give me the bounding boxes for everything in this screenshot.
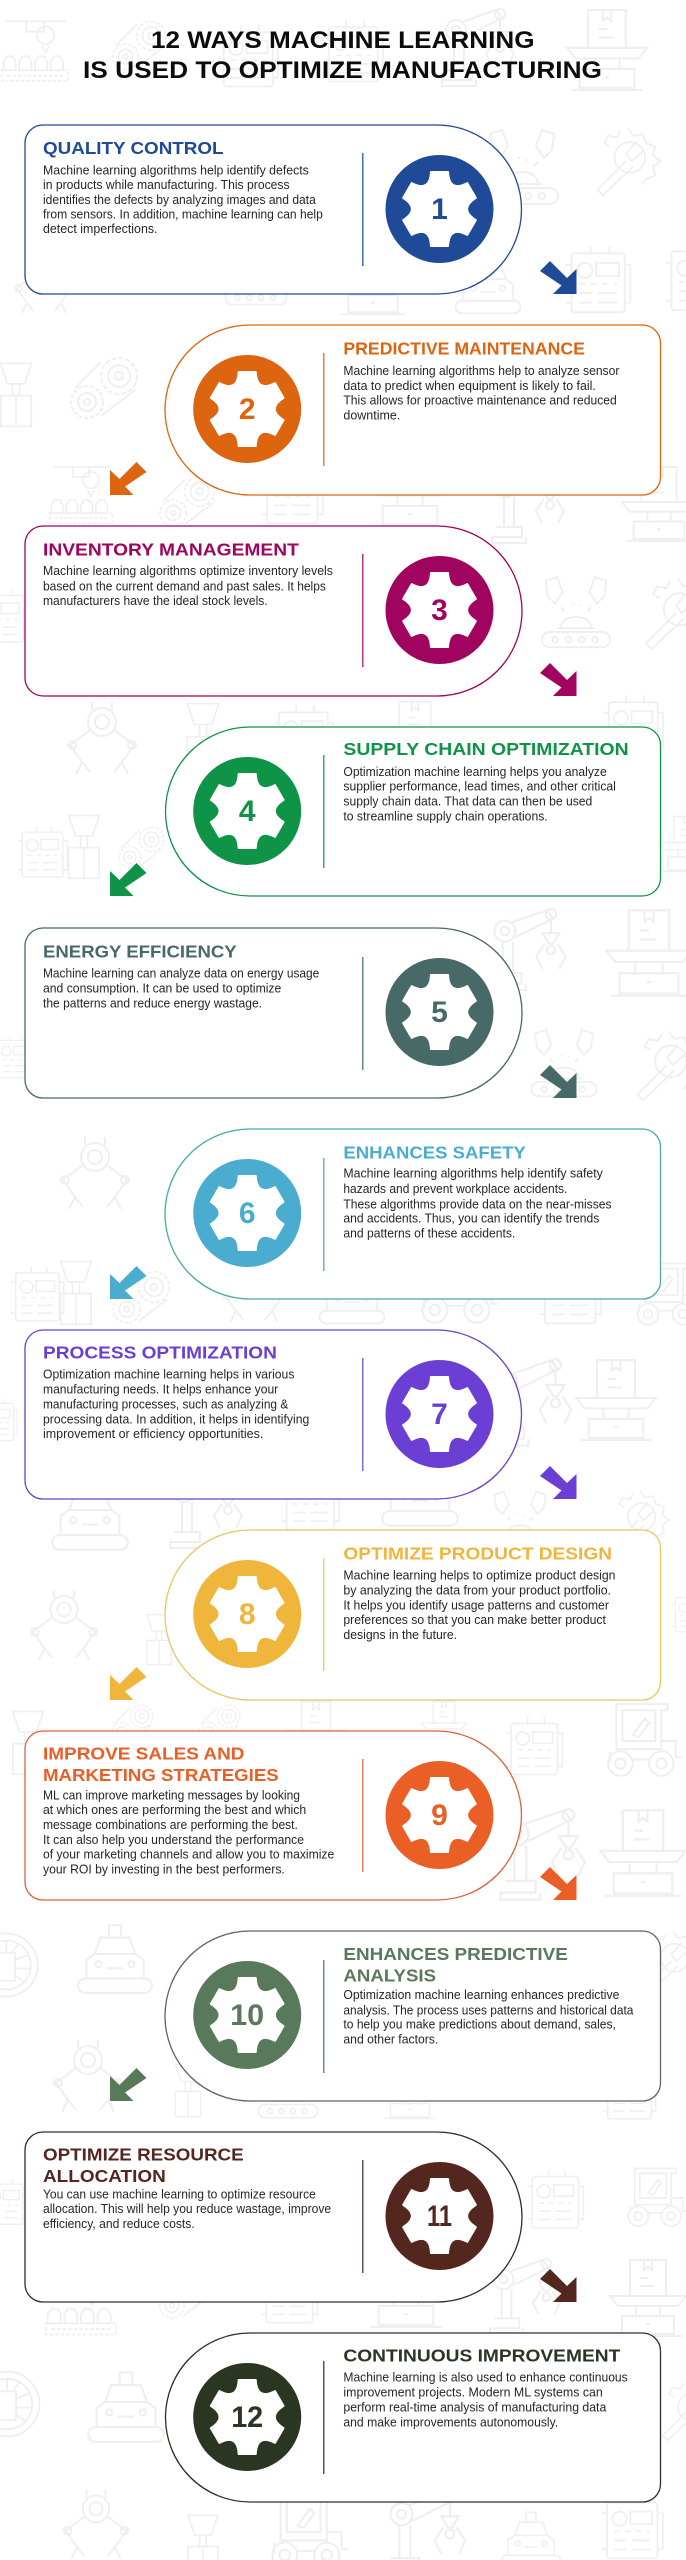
- text: sales and marketing description: It can also help you understand the performance: [43, 1833, 304, 1847]
- text: quality control description: Machine learning algorithms help identify defects: [43, 163, 309, 177]
- text: quality control description: [43, 163, 323, 236]
- text: enhances safety description: and accidents. Thus, you can identify the trends: [343, 1212, 599, 1226]
- heading: inventory management: INVENTORY MANAGEMENT: [43, 539, 299, 559]
- panel: 10 enhances predictive analysis: [165, 1931, 660, 2101]
- arrow: 11 to 12: [540, 2269, 576, 2302]
- heading: predictive maintenance: PREDICTIVE MAINTENANCE: [343, 338, 585, 358]
- text: continuous improvement description: improvement projects. Modern ML systems can: [343, 2386, 603, 2400]
- heading: energy efficiency: ENERGY EFFICIENCY: [43, 942, 237, 962]
- heading: enhances predictive analysis: [343, 1944, 568, 1986]
- text: predictive analysis description: to help you make predictions about demand, sales,: [343, 2018, 616, 2032]
- title: IS USED TO OPTIMIZE MANUFACTURING: [83, 57, 602, 84]
- text: predictive maintenance description: Machine learning algorithms help to analyze sensor: [343, 364, 619, 378]
- arrow: 10 to 11: [110, 2068, 146, 2101]
- arrow: 6 to 7: [110, 1266, 146, 1299]
- arrow: 5 to 6: [540, 1065, 576, 1098]
- icon: gear badge 5: [386, 958, 494, 1066]
- panel: 11 optimize resource allocation: [25, 2132, 522, 2302]
- icon: gear badge 8: 8: [239, 1598, 256, 1631]
- heading: continuous improvement: CONTINUOUS IMPROVEMENT: [343, 2346, 621, 2366]
- text: product design description: preferences so that you can make better product: [343, 1613, 606, 1627]
- text: quality control description: in products while manufacturing. This process: [43, 178, 290, 192]
- heading: improve sales and marketing strategies: MARKETING STRATEGIES: [43, 1765, 279, 1785]
- icon: gear badge 3: 3: [431, 594, 448, 627]
- text: continuous improvement description: Machine learning is also used to enhance continuous: [343, 2371, 628, 2385]
- icon: gear badge 3: [386, 556, 494, 664]
- text: predictive maintenance description: data to predict when equipment is likely to fail.: [343, 379, 596, 393]
- icon: gear badge 2: 2: [239, 393, 256, 426]
- icon: gear badge 11: [386, 2162, 494, 2270]
- arrow: 7 to 8: [540, 1466, 576, 1499]
- heading: optimize resource allocation: [43, 2145, 244, 2186]
- text: enhances safety description: [343, 1167, 612, 1241]
- text: inventory management description: based on the current demand and past sales. It helps: [43, 579, 326, 593]
- text: product design description: designs in the future.: [343, 1628, 457, 1642]
- icon: gear badge 1: [386, 155, 494, 263]
- text: resource allocation description: You can use machine learning to optimize resource: [43, 2187, 316, 2201]
- heading: quality control: QUALITY CONTROL: [43, 138, 224, 158]
- panel: 12 continuous improvement: [166, 2333, 661, 2502]
- text: enhances safety description: Machine learning algorithms help identify safety: [343, 1167, 603, 1181]
- icon: gear badge 5: 5: [431, 996, 448, 1029]
- icon: gear badge 10: 10: [230, 1999, 264, 2032]
- text: process optimization description: processing data. In addition, it helps in identifying: [43, 1412, 309, 1426]
- panel: 5 energy efficiency: [25, 928, 522, 1098]
- icon: gear badge 2: [193, 355, 301, 463]
- text: energy efficiency description: [43, 967, 319, 1010]
- panel: 6 enhances safety: [165, 1129, 660, 1299]
- panel: 3 inventory management: [25, 526, 522, 696]
- arrow: 1 to 2: [540, 261, 576, 294]
- panel: 2 predictive maintenance: [165, 325, 660, 495]
- text: product design description: [343, 1568, 616, 1642]
- text: energy efficiency description: Machine learning can analyze data on energy usage: [43, 967, 319, 981]
- text: enhances safety description: and patterns of these accidents.: [343, 1227, 515, 1241]
- icon: gear badge 10: [193, 1961, 301, 2069]
- icon: gear badge 7: [386, 1360, 494, 1468]
- heading: supply chain optimization: SUPPLY CHAIN OPTIMIZATION: [343, 739, 629, 759]
- text: product design description: It helps you identify usage patterns and customer: [343, 1598, 609, 1612]
- text: predictive analysis description: analysis. The process uses patterns and historical data: [343, 2003, 633, 2017]
- text: inventory management description: Machine learning algorithms optimize inventory levels: [43, 564, 333, 578]
- heading: optimize resource allocation: ALLOCATION: [43, 2166, 166, 2186]
- icon: gear badge 8: [193, 1560, 301, 1668]
- icon: gear badge 7: 7: [431, 1398, 448, 1431]
- text: energy efficiency description: the patterns and reduce energy wastage.: [43, 996, 262, 1010]
- text: continuous improvement description: [343, 2371, 628, 2429]
- text: process optimization description: improvement or efficiency opportunities.: [43, 1427, 263, 1441]
- text: process optimization description: [43, 1368, 309, 1441]
- text: sales and marketing description: ML can improve marketing messages by looking: [43, 1788, 300, 1802]
- text: product design description: Machine learning helps to optimize product design: [343, 1568, 616, 1582]
- icon: gear badge 9: [386, 1761, 494, 1869]
- heading: optimize resource allocation: OPTIMIZE RESOURCE: [43, 2145, 244, 2165]
- text: predictive analysis description: and other factors.: [343, 2033, 438, 2047]
- text: resource allocation description: [43, 2187, 331, 2231]
- heading: optimize product design: OPTIMIZE PRODUCT DESIGN: [343, 1543, 612, 1563]
- heading: enhances safety: ENHANCES SAFETY: [343, 1142, 526, 1162]
- text: predictive analysis description: [343, 1988, 633, 2047]
- icon: gear badge 1: 1: [431, 193, 448, 226]
- text: sales and marketing description: message combinations are performing the best.: [43, 1818, 298, 1832]
- heading: improve sales and marketing strategies: [43, 1743, 279, 1785]
- text: sales and marketing description: at which ones are performing the best and which: [43, 1803, 306, 1817]
- icon: gear badge 12: 12: [231, 2401, 263, 2434]
- text: sales and marketing description: of your marketing channels and allow you to maximize: [43, 1848, 334, 1862]
- text: supply chain description: [343, 765, 616, 824]
- text: predictive analysis description: Optimization machine learning enhances predictive: [343, 1988, 619, 2002]
- text: predictive maintenance description: [343, 364, 619, 422]
- text: resource allocation description: allocation. This will help you reduce wastage, improve: [43, 2202, 331, 2216]
- text: process optimization description: manufacturing processes, such as analyzing &: [43, 1397, 289, 1411]
- text: predictive maintenance description: downtime.: [343, 408, 400, 422]
- text: inventory management description: [43, 564, 333, 608]
- arrow: 3 to 4: [540, 663, 576, 696]
- panel: 8 optimize product design: [165, 1530, 660, 1700]
- text: product design description: by analyzing the data from your product portfolio.: [343, 1583, 611, 1597]
- arrow: 4 to 5: [110, 863, 146, 896]
- text: quality control description: from sensors. In addition, machine learning can help: [43, 208, 323, 222]
- arrow: 9 to 10: [540, 1867, 576, 1900]
- icon: gear badge 9: 9: [431, 1799, 448, 1832]
- heading: enhances predictive analysis: ANALYSIS: [343, 1966, 436, 1986]
- text: supply chain description: supplier performance, lead times, and other critical: [343, 780, 616, 794]
- icon: gear badge 6: 6: [239, 1197, 256, 1230]
- text: sales and marketing description: your ROI by investing in the best performers.: [43, 1863, 285, 1877]
- text: process optimization description: Optimization machine learning helps in various: [43, 1368, 294, 1382]
- icon: gear badge 4: 4: [239, 795, 256, 828]
- text: supply chain description: Optimization machine learning helps you analyze: [343, 765, 607, 779]
- heading: enhances predictive analysis: ENHANCES PREDICTIVE: [343, 1944, 568, 1964]
- text: resource allocation description: efficiency, and reduce costs.: [43, 2217, 195, 2231]
- text: sales and marketing description: [43, 1788, 334, 1877]
- arrow: 8 to 9: [110, 1667, 146, 1700]
- text: quality control description: identifies the defects by analyzing images and data: [43, 193, 316, 207]
- title: [83, 27, 602, 84]
- text: predictive maintenance description: This allows for proactive maintenance and reduced: [343, 393, 617, 407]
- panel: 1 quality control: [25, 125, 522, 294]
- text: continuous improvement description: perform real-time analysis of manufacturing data: [343, 2400, 606, 2414]
- arrow: 2 to 3: [110, 462, 146, 495]
- text: continuous improvement description: and make improvements autonomously.: [343, 2415, 558, 2429]
- text: enhances safety description: These algorithms provide data on the near-misses: [343, 1197, 612, 1211]
- text: energy efficiency description: and consumption. It can be used to optimize: [43, 982, 281, 996]
- icon: gear badge 11: 11: [427, 2200, 452, 2233]
- panel: 4 supply chain optimization: [166, 727, 661, 896]
- icon: gear badge 12: [193, 2363, 301, 2471]
- icon: gear badge 6: [193, 1159, 301, 1267]
- title: 12 WAYS MACHINE LEARNING: [151, 27, 534, 54]
- text: supply chain description: supply chain data. That data can then be used: [343, 795, 592, 809]
- heading: improve sales and marketing strategies: IMPROVE SALES AND: [43, 1743, 244, 1763]
- text: supply chain description: to streamline supply chain operations.: [343, 810, 548, 824]
- panel: 9 improve sales and marketing strategies: [25, 1731, 522, 1900]
- text: quality control description: detect imperfections.: [43, 222, 158, 236]
- panel: 7 process optimization: [25, 1330, 522, 1499]
- text: inventory management description: manufacturers have the ideal stock levels.: [43, 594, 268, 608]
- heading: process optimization: PROCESS OPTIMIZATION: [43, 1342, 277, 1362]
- text: enhances safety description: hazards and prevent workplace accidents.: [343, 1182, 567, 1196]
- text: process optimization description: manufacturing needs. It helps enhance your: [43, 1382, 278, 1396]
- icon: gear badge 4: [193, 757, 301, 865]
